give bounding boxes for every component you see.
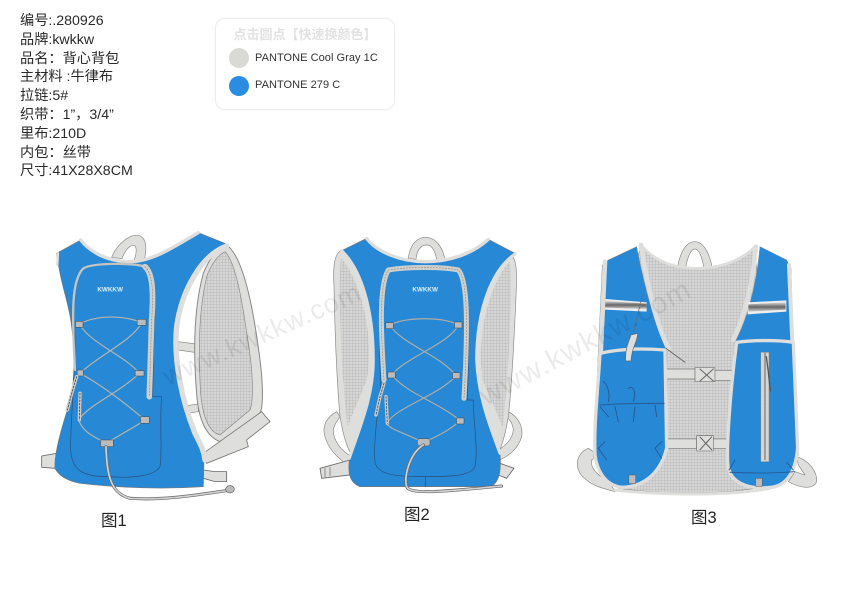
main body bbox=[342, 238, 515, 487]
top handle bbox=[677, 242, 713, 275]
text block: product specifications: 织带：1”，3/4” bbox=[20, 107, 114, 123]
zipper pulls bbox=[67, 377, 80, 420]
side strap loops bbox=[577, 448, 615, 492]
right strap loop bbox=[498, 412, 522, 460]
main body bbox=[55, 233, 227, 488]
sternum straps and buckles bbox=[665, 368, 733, 451]
pocket zipper left side bbox=[73, 264, 145, 370]
swatch heading: 点击圆点【快速换颜色】 bbox=[233, 27, 376, 42]
caption: figure 3: 图3 bbox=[691, 509, 717, 527]
left side pocket bbox=[595, 349, 667, 487]
right mesh panel bbox=[476, 253, 517, 453]
bungee cord lacing bbox=[79, 317, 145, 443]
panel: colour swatches bbox=[215, 18, 395, 110]
left mesh panel bbox=[334, 250, 374, 453]
text block: product specifications bbox=[20, 12, 133, 179]
watermark left: www.kwkkw.com bbox=[157, 277, 366, 392]
swatch: cool gray bbox=[229, 48, 249, 68]
text block: product specifications: 拉链:5# bbox=[20, 88, 68, 104]
caption: figure 1: 图1 bbox=[101, 512, 127, 530]
backpack: view 3 back bbox=[577, 242, 817, 494]
cord loops bbox=[76, 319, 149, 447]
lower strap and buckle bbox=[203, 412, 270, 463]
back mesh panel bbox=[195, 245, 262, 442]
backpack: view 1 side-front bbox=[42, 233, 270, 499]
bungee cord lacing bbox=[387, 319, 460, 443]
cord loops bbox=[386, 322, 464, 446]
text block: product specifications: 编号:.280926 bbox=[20, 13, 104, 29]
text block: product specifications: 品牌:kwkkw bbox=[20, 32, 94, 48]
caption: figure 2: 图2 bbox=[404, 506, 430, 524]
mouthpiece and tube bbox=[633, 295, 642, 333]
left strap loop bbox=[324, 412, 352, 467]
side strap connectors bbox=[178, 342, 198, 413]
swatch: blue bbox=[229, 76, 249, 96]
bottom webbing and buckles bbox=[320, 460, 350, 478]
side zipper pull bbox=[666, 348, 685, 362]
backpack: view 2 front bbox=[320, 237, 522, 492]
back mesh panel bbox=[605, 245, 772, 493]
right side pocket bbox=[728, 341, 798, 488]
text block: product specifications: 品名：背心背包 bbox=[20, 51, 119, 67]
front pocket bbox=[375, 267, 476, 477]
label: blue: PANTONE 279 C bbox=[255, 79, 340, 91]
logo: KWKKW bbox=[412, 287, 438, 294]
text block: product specifications: 主材料 :牛律布 bbox=[20, 69, 113, 85]
shoulder binding bbox=[367, 238, 488, 262]
top handle bbox=[112, 235, 146, 261]
left shoulder blue bbox=[593, 247, 667, 458]
reflective strips bbox=[605, 299, 647, 312]
drinking tube bbox=[106, 447, 227, 499]
shoulder binding bbox=[81, 233, 198, 262]
watermark right: www.kwkkw.com bbox=[473, 273, 697, 413]
logo: KWKKW bbox=[97, 287, 123, 294]
text block: product specifications: 里布:210D bbox=[20, 126, 86, 142]
label: cool gray: PANTONE Cool Gray 1C bbox=[255, 52, 378, 64]
vertical zipper bbox=[761, 352, 769, 462]
shoulder edge bindings bbox=[641, 245, 668, 348]
top handle bbox=[408, 237, 445, 261]
drinking tube bbox=[406, 445, 502, 492]
front pocket bbox=[71, 263, 162, 477]
zipper pulls bbox=[376, 383, 387, 423]
text block: product specifications: 尺寸:41X28X8CM bbox=[20, 163, 133, 179]
pocket zipper bbox=[381, 267, 466, 398]
pocket zipper right side bbox=[145, 267, 153, 397]
right shoulder blue bbox=[732, 247, 797, 452]
text block: product specifications: 内包：丝带 bbox=[20, 145, 91, 161]
bottom binding bbox=[615, 488, 770, 494]
